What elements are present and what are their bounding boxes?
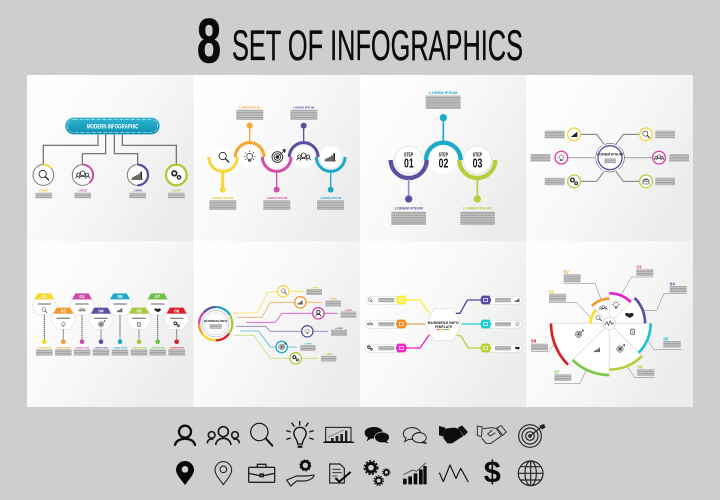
central hexagon: TEMPLATE bbox=[434, 325, 453, 329]
wedge 7 green bbox=[554, 323, 609, 381]
wedge 2 orange: 02 bbox=[564, 270, 569, 275]
satellite: bulb bbox=[531, 151, 568, 164]
icon: briefcase bbox=[249, 464, 275, 482]
hexagon 05 bbox=[108, 293, 132, 356]
panel: modern infographic tree bbox=[33, 118, 187, 198]
pill: bulb bbox=[480, 320, 522, 328]
banner pill bbox=[65, 118, 160, 134]
hexagon 03: LOREM IPSUM bbox=[75, 347, 89, 349]
ring bbox=[199, 307, 232, 340]
icon: document check bbox=[330, 464, 351, 483]
wedge 1 yellow: 01 bbox=[549, 289, 555, 294]
wedge 4 purple: 04 bbox=[670, 281, 675, 286]
connectors bbox=[406, 300, 480, 348]
icon: outline handshake bbox=[477, 426, 506, 443]
step 02: LOREM IPSUM bbox=[429, 90, 458, 95]
step 01: LOREM IPSUM bbox=[395, 206, 423, 211]
step 03: LOREM IPSUM bbox=[463, 206, 492, 211]
icon: magnifier bbox=[251, 423, 272, 446]
node: search bbox=[33, 165, 54, 198]
wedge 8 red bbox=[531, 323, 609, 365]
node: search: LOREM bbox=[39, 191, 48, 193]
satellite: people bbox=[653, 151, 689, 164]
icon: target bbox=[519, 424, 545, 447]
pill: people bbox=[365, 320, 407, 328]
wedge 4 purple bbox=[609, 281, 687, 323]
title: 8 bbox=[197, 6, 221, 76]
hexagon 07 bbox=[145, 293, 170, 356]
wedge 6 olive bbox=[609, 323, 654, 376]
icon: globe bbox=[518, 461, 543, 486]
hexagon 04 bbox=[89, 308, 113, 356]
wedge 2 orange bbox=[564, 270, 609, 323]
hexagon 08: 08 bbox=[174, 308, 180, 313]
icon row: right half bbox=[364, 424, 545, 489]
wedge 5 teal: 05 bbox=[663, 336, 669, 341]
step: teal chart: LOREM IPSUM bbox=[320, 196, 342, 200]
title: SET OF INFOGRAPHICS bbox=[232, 22, 523, 70]
wedge 3 magenta bbox=[609, 265, 653, 323]
icon: person bbox=[175, 426, 195, 445]
step 02: 02 bbox=[439, 157, 448, 171]
step 02: STEP bbox=[439, 153, 448, 159]
node: people bbox=[72, 165, 93, 198]
hexagon 02 bbox=[51, 308, 76, 356]
icon: dollar: $ bbox=[484, 455, 501, 489]
branch: purple bulb bbox=[236, 326, 347, 337]
pill: chart bbox=[480, 296, 522, 304]
hexagon 03 bbox=[70, 293, 94, 356]
hexagon 01: LOREM IPSUM bbox=[37, 347, 52, 349]
pill: search bbox=[365, 296, 407, 304]
branch: purple bulb: LOREM bbox=[335, 328, 343, 330]
central hexagon: BUSINESS INFO bbox=[428, 320, 459, 325]
hexagon 01 bbox=[32, 293, 57, 356]
branch: yellow search: LOREM bbox=[311, 287, 318, 289]
wedge 8 red: 08 bbox=[531, 339, 537, 344]
step: yellow search: LOREM IPSUM bbox=[212, 196, 234, 200]
central hexagon bbox=[425, 309, 462, 340]
title bbox=[197, 6, 523, 76]
branch: green gears bbox=[234, 335, 336, 364]
hexagon 02: 02 bbox=[61, 308, 66, 313]
centre hub bbox=[603, 317, 616, 330]
icon: filled chat bbox=[365, 427, 389, 443]
satellite: chart bbox=[545, 128, 580, 141]
branch: green gears: LOREM bbox=[325, 354, 333, 356]
step: pink target: LOREM IPSUM bbox=[266, 196, 288, 200]
wedge 6 olive: 06 bbox=[637, 365, 643, 370]
branch: yellow search bbox=[233, 286, 322, 313]
icon: outline pin bbox=[215, 462, 232, 485]
step: purple people: LOREM IPSUM bbox=[293, 105, 315, 109]
icon: growth bars bbox=[403, 463, 427, 484]
step 03 bbox=[459, 146, 495, 225]
panel: spiral pie bbox=[531, 265, 687, 383]
step 01 bbox=[391, 146, 427, 225]
pill: handshake bbox=[480, 344, 522, 352]
panel: hub with six satellites bbox=[531, 128, 689, 188]
branch: pink person bbox=[246, 308, 356, 322]
panel: circuit ring bbox=[199, 286, 356, 364]
panel backgrounds bbox=[27, 75, 693, 407]
step 01: STEP bbox=[404, 153, 414, 159]
wedge 5 teal bbox=[609, 323, 681, 353]
wedge 1 yellow bbox=[549, 289, 609, 323]
step 02 bbox=[426, 90, 461, 174]
node: chart: LOREM bbox=[133, 191, 142, 193]
icon: presentation chart bbox=[323, 427, 354, 443]
panel: eight hexagons bbox=[32, 293, 189, 356]
hexagon 06: LOREM IPSUM bbox=[132, 347, 146, 349]
icon: gears bbox=[364, 461, 390, 485]
icon: zigzag line bbox=[439, 465, 468, 482]
icon: outline chat bbox=[403, 428, 427, 443]
hexagon 06 bbox=[127, 308, 151, 356]
hexagon 01: 01 bbox=[42, 294, 47, 299]
icon: group bbox=[207, 427, 239, 445]
icon row: left half bbox=[175, 421, 354, 486]
satellite: search bbox=[640, 128, 675, 141]
wedge 7 green: 07 bbox=[554, 370, 560, 375]
hexagon 07: 07 bbox=[155, 294, 161, 299]
hub: LOREM IPSUM bbox=[597, 153, 623, 157]
panel: central hexagon with pills bbox=[365, 296, 522, 352]
icon: filled pin bbox=[176, 461, 194, 485]
hub bbox=[596, 143, 624, 172]
pill: gears bbox=[365, 344, 407, 352]
leader lines bbox=[531, 277, 687, 383]
hexagon 04: LOREM IPSUM bbox=[94, 347, 108, 349]
satellite: case bbox=[640, 175, 675, 188]
node: gears bbox=[166, 165, 187, 198]
icon: filled handshake bbox=[439, 425, 468, 443]
satellite: gears bbox=[545, 175, 580, 188]
hexagon 08: LOREM IPSUM bbox=[170, 347, 184, 349]
node: gears: LOREM bbox=[172, 191, 181, 193]
banner pill: MODERN INFOGRAPHIC bbox=[87, 123, 139, 130]
icon: hand and gear bbox=[287, 460, 314, 486]
hexagon 07: LOREM IPSUM bbox=[151, 347, 165, 349]
branch: teal target bbox=[240, 331, 316, 353]
panel: three steps bbox=[391, 90, 495, 225]
step 01: 01 bbox=[404, 157, 414, 171]
hexagon 04: 04 bbox=[98, 308, 104, 313]
wedge 3 magenta: 03 bbox=[636, 265, 642, 270]
branch: pink person: LOREM bbox=[345, 310, 352, 312]
hexagon 02: LOREM IPSUM bbox=[56, 347, 71, 349]
branch: orange chart bbox=[237, 297, 341, 317]
hexagon 03: 03 bbox=[79, 294, 85, 299]
hexagon 05: LOREM IPSUM bbox=[113, 347, 127, 349]
ring: BUSINESS INFO bbox=[204, 319, 228, 323]
step 03: STEP bbox=[473, 153, 482, 159]
step: orange bulb: LOREM IPSUM bbox=[239, 105, 261, 109]
hexagon 05: 05 bbox=[117, 294, 123, 299]
panel: snake timeline bbox=[209, 105, 345, 210]
node: chart bbox=[127, 165, 148, 198]
hexagon 08 bbox=[164, 308, 189, 356]
step 03: 03 bbox=[473, 157, 482, 171]
branch: orange chart: LOREM bbox=[329, 299, 337, 301]
node: people: LOREM bbox=[78, 191, 87, 193]
icon: light bulb bbox=[286, 421, 314, 447]
hexagon 06: 06 bbox=[136, 308, 142, 313]
branch: teal target: LOREM bbox=[304, 343, 312, 345]
